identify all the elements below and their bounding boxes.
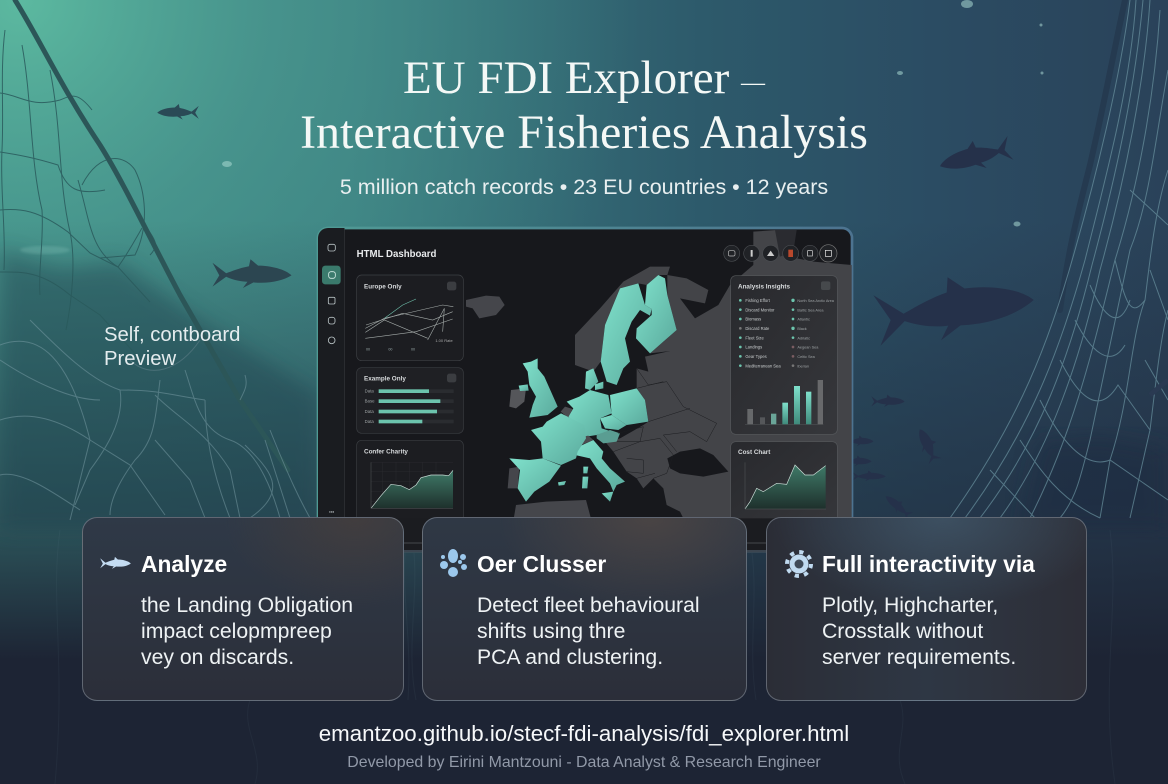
panel: line chart: 00	[411, 348, 415, 352]
panel: bar chart: Data	[365, 409, 374, 414]
title: Interactive Fisheries Analysis	[300, 106, 868, 159]
title	[300, 52, 868, 159]
panel: legend and columns: Fishing Effort	[745, 298, 771, 303]
card: clusters	[422, 517, 747, 701]
panel: legend and columns: Iberian	[797, 364, 809, 368]
subtitle: 5 million catch records • 23 EU countries • 12 years	[340, 175, 828, 199]
card text	[141, 594, 353, 668]
panel: bar chart	[357, 368, 463, 433]
panel: second area chart: Cost Chart	[738, 449, 771, 456]
sidebar	[318, 228, 344, 551]
toolbar icons	[724, 245, 837, 262]
panel: legend and columns: Biomass	[745, 317, 761, 322]
sidebar: ▪▪▪	[329, 509, 335, 515]
card text: Crosstalk without	[822, 620, 983, 642]
panel: legend and columns: Atlantic	[797, 318, 810, 322]
panel: legend and columns: Celtic Sea	[797, 355, 816, 359]
panel: legend and columns: Landings	[745, 345, 762, 350]
panel: area chart	[356, 440, 464, 517]
panel: legend and columns	[731, 276, 837, 434]
panel: legend and columns: Discard Rate	[745, 326, 770, 331]
card text	[477, 594, 700, 668]
map of Europe	[466, 230, 852, 525]
icon: clusters	[440, 549, 467, 577]
card text: server requirements.	[822, 646, 1016, 668]
dashboard preview	[316, 226, 854, 553]
card text	[822, 594, 1016, 668]
card: interactivity	[766, 517, 1087, 701]
side caption: Self, contboard	[104, 324, 240, 346]
panel: bar chart: Base	[365, 399, 375, 404]
dashboard heading: HTML Dashboard	[357, 249, 437, 260]
panel: bar chart: Example Only	[364, 375, 406, 382]
card heading: Oer Clusser	[477, 551, 606, 577]
panel: legend and columns: Gear Types	[745, 354, 767, 359]
panel: legend and columns: Adriatic	[797, 336, 810, 340]
icon: gear	[785, 550, 813, 578]
card text: the Landing Obligation	[141, 594, 353, 616]
card text: Plotly, Highcharter,	[822, 594, 998, 616]
panel: second area chart	[730, 442, 838, 518]
card: Analyze	[82, 517, 404, 701]
card heading: Analyze	[141, 551, 227, 577]
panel: bar chart: Data	[365, 419, 374, 424]
card text: Detect fleet behavioural	[477, 594, 700, 616]
icon: fish	[100, 557, 131, 569]
panel: legend and columns: Analysis Insights	[738, 283, 791, 290]
card text: PCA and clustering.	[477, 646, 663, 668]
card text: impact celopmpreep	[141, 620, 332, 642]
footer credit: Developed by Eirini Mantzouni - Data Analyst & Research Engineer	[347, 754, 821, 771]
card text: vey on discards.	[141, 646, 294, 668]
panel: bar chart: Data	[365, 389, 374, 394]
panel: legend and columns: Discard Monitor	[745, 307, 775, 312]
panel: area chart: Confer Charity	[364, 449, 408, 456]
url: emantzoo.github.io/stecf-fdi-analysis/fdi_explorer.html	[319, 721, 849, 746]
panel: legend and columns: North Sea Arctic Area	[797, 299, 835, 303]
card text: shifts using thre	[477, 620, 625, 642]
panel: line chart: 00	[388, 348, 392, 352]
panel: legend and columns: Fleet Size	[745, 335, 765, 340]
panel: line chart: 00	[366, 348, 370, 352]
panel: line chart: 1.00 Rate	[435, 338, 453, 343]
card heading: Full interactivity via	[822, 551, 1035, 577]
panel: line chart: Europe Only	[364, 283, 402, 290]
title: EU FDI Explorer —	[403, 52, 765, 104]
panel: legend and columns: Mediterranean Sea	[745, 363, 781, 368]
panel: line chart	[357, 275, 463, 361]
panel: legend and columns: Baltic Sea Area	[797, 308, 824, 312]
panel: legend and columns: Aegean Sea	[797, 346, 819, 350]
side caption: Preview	[104, 348, 176, 370]
side caption	[104, 324, 240, 370]
panel: legend and columns: Black	[797, 327, 807, 331]
